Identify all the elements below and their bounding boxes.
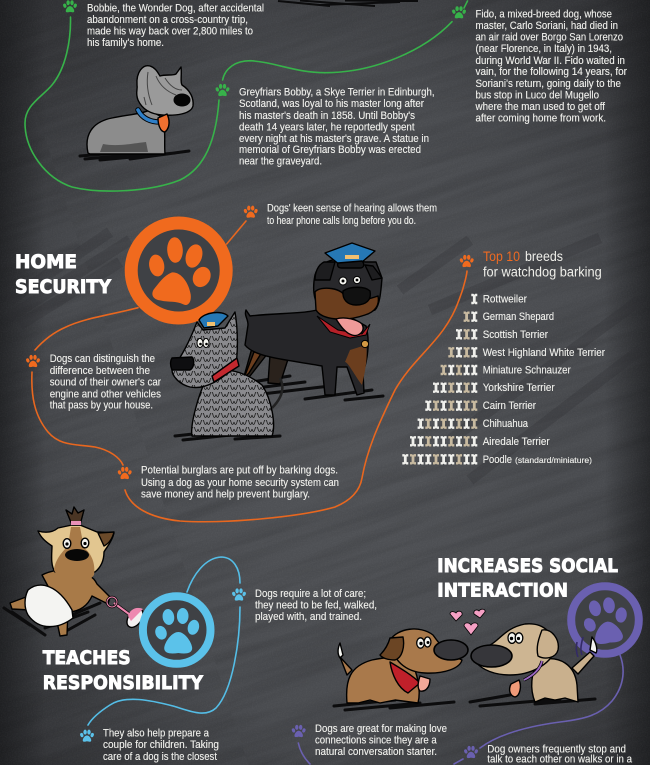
- hearts: [450, 609, 485, 635]
- breed names: German Shepard: [483, 311, 554, 323]
- blue connector line: [88, 557, 240, 725]
- text: Bobbie: [87, 2, 264, 49]
- text: burglars: save money and help prevent burglary.: [141, 488, 310, 500]
- illustration: scottish terrier with police hat: [170, 312, 282, 440]
- heading: top 10 breeds: for watchdog barking: [483, 264, 602, 280]
- icon: orange paws: [26, 206, 474, 479]
- breed names: [483, 294, 605, 466]
- text: Fido: where the man used to get off: [475, 101, 606, 113]
- orange connector line: [32, 221, 467, 522]
- text: Fido: master, Carlo Soriani, had died in: [476, 20, 618, 32]
- text: distinguish engine: Dogs can distinguish the: [50, 353, 155, 365]
- heading: teaches responsibility: RESPONSIBILITY: [43, 672, 203, 694]
- icon: purple paws: [291, 725, 478, 758]
- text: distinguish engine: difference between the: [50, 365, 150, 377]
- text: Fido: Fido, a mixed-breed dog, whose: [476, 8, 612, 20]
- green connector line: [25, 1, 468, 191]
- text: distinguish engine: sound of their owner's car: [50, 377, 161, 389]
- text: love connections: [315, 723, 447, 758]
- text: Greyfriars Bobby: Scotland, was loyal to his master long after: [239, 98, 424, 110]
- right dog: [470, 624, 597, 706]
- text: Fido: during World War II. Fido waited in: [476, 55, 625, 67]
- illustration: rottweiler with police hat: [243, 243, 383, 400]
- text: prepare for children: [103, 727, 219, 763]
- purple connector line: [298, 655, 623, 764]
- text: require care: played with, and trained.: [255, 611, 362, 623]
- top 10 breeds list: [402, 249, 605, 466]
- text: Bobbie: his family's home.: [87, 37, 164, 49]
- breed names: West Highland White Terrier: [483, 347, 605, 359]
- breed names: Scottish Terrier: [483, 329, 548, 341]
- heading: teaches responsibility: [43, 647, 203, 694]
- text: Fido: [475, 8, 627, 124]
- text: Greyfriars Bobby: near the graveyard.: [239, 156, 322, 168]
- heading: top 10 breeds: breeds: [525, 249, 563, 264]
- icon: green paws: [63, 0, 466, 96]
- text: Bobbie: made his way back over 2,800 miles to: [87, 26, 253, 38]
- breed names: Poodle: [483, 454, 512, 466]
- heading: increases social interaction: INTERACTION: [437, 579, 568, 601]
- text: Fido: after coming home from work.: [476, 112, 606, 124]
- icon: blue paws: [80, 588, 246, 742]
- text: hearing: Dogs' keen sense of hearing allows them: [267, 202, 437, 214]
- text: distinguish engine: [50, 353, 162, 412]
- text: Fido: Soriani's return, going daily to the: [476, 78, 621, 90]
- breed names: Miniature Schnauzer: [483, 364, 571, 376]
- text: Greyfriars Bobby: every night at his master's grave. A statue in: [239, 133, 429, 145]
- panel: home security heading: HOME: [15, 251, 77, 273]
- left dog: [334, 629, 468, 710]
- text: Bobbie: abandonment on a cross-country trip,: [87, 14, 248, 26]
- icon: orange circle with paw: [131, 223, 226, 318]
- panel: home security heading: [15, 251, 111, 298]
- bone rating icons: [402, 294, 477, 464]
- text: love connections: Dogs are great for making love: [315, 723, 447, 735]
- text: Greyfriars Bobby: memorial of Greyfriars Bobby was erected: [239, 144, 421, 156]
- heading: increases social interaction: [437, 555, 618, 601]
- breed names: Chihuahua: [483, 418, 528, 430]
- text: Fido: bus stop in Luco del Mugello: [476, 90, 599, 102]
- icon: blue circle with paw: [143, 596, 210, 664]
- text: Greyfriars Bobby: Greyfriars Bobby, a Skye Terrier in Edinburgh,: [239, 86, 434, 98]
- text: Bobbie: Bobbie, the Wonder Dog, after accidental: [87, 2, 264, 14]
- breed names: Cairn Terrier: [483, 400, 536, 412]
- text: hearing: [267, 202, 437, 227]
- text: require care: they need to be fed, walked,: [255, 600, 377, 612]
- text: love connections: natural conversation starter.: [315, 746, 437, 758]
- text: burglars: [141, 464, 339, 500]
- text: Greyfriars Bobby: death 14 years later, he reportedly spent: [239, 122, 415, 134]
- breed names: (standard/miniature): [515, 455, 592, 465]
- text: Greyfriars Bobby: [239, 86, 434, 168]
- breed names: Rottweiler: [483, 294, 527, 306]
- text: distinguish engine: that pass by your house.: [50, 400, 153, 412]
- text: hearing: to hear phone calls long before you do.: [267, 215, 416, 227]
- text: dog owners: [487, 744, 632, 765]
- text: Fido: an air raid over Borgo San Lorenzo: [476, 32, 623, 44]
- heading: top 10 breeds: Top 10: [483, 249, 520, 264]
- text: prepare for children: They also help prepare a: [103, 727, 209, 739]
- text: love connections: connections since they are a: [315, 734, 437, 746]
- icon: purple circle with paw: [571, 586, 639, 654]
- text: require care: [255, 588, 377, 623]
- text: dog owners: Dog owners frequently stop and: [487, 744, 626, 756]
- text: Fido: vain, for the following 14 years, for: [476, 66, 627, 78]
- text: require care: Dogs require a lot of care;: [255, 588, 366, 600]
- text: distinguish engine: engine and other vehicles: [50, 388, 162, 400]
- top dog shadow scribble: [278, 0, 418, 6]
- breed names: Yorkshire Terrier: [483, 382, 555, 394]
- heading: teaches responsibility: TEACHES: [43, 647, 131, 669]
- text: prepare for children: care of a dog is the closest: [103, 751, 217, 763]
- illustration: dogs nose to nose with hearts: [334, 609, 597, 710]
- text: prepare for children: couple for children. Taking: [103, 739, 219, 751]
- heading: increases social interaction: INCREASES SOCIAL: [437, 555, 618, 577]
- text: Fido: (near Florence, in Italy) in 1943,: [476, 43, 612, 55]
- heading: top 10 breeds: [483, 249, 602, 280]
- panel: home security heading: SECURITY: [15, 276, 111, 298]
- text: burglars: Potential burglars are put off by barking dogs.: [141, 464, 338, 476]
- text: Greyfriars Bobby: his master's death in 1858. Until Bobby's: [239, 110, 416, 122]
- breed names: Airedale Terrier: [483, 436, 550, 448]
- illustration: Skye terrier: [80, 66, 193, 160]
- illustration: puppy in diaper with rattle: [4, 507, 146, 636]
- text: burglars: Using a dog as your home security system can: [141, 477, 339, 489]
